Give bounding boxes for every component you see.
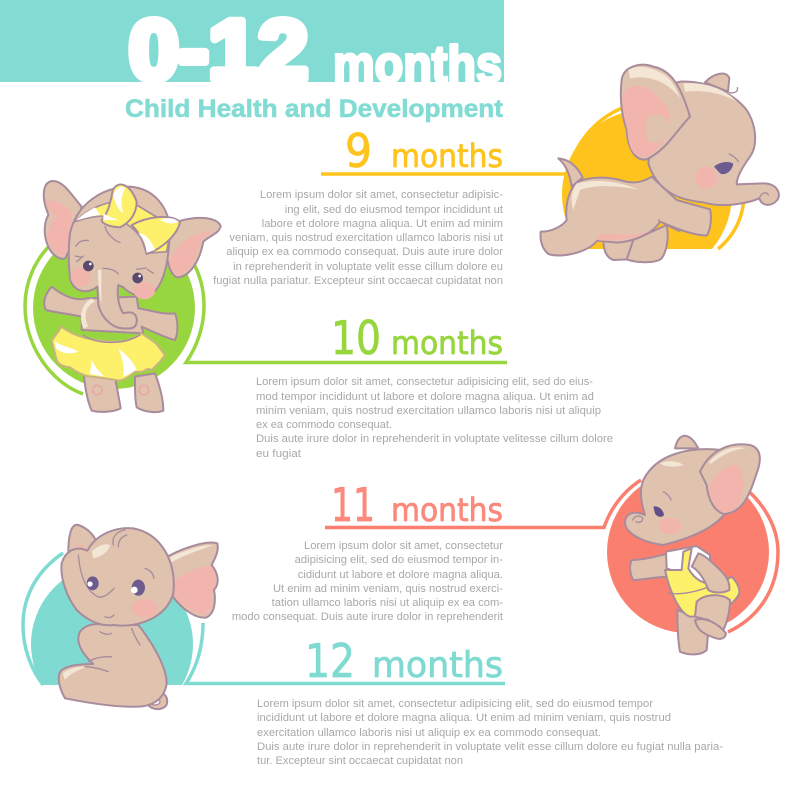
text block: 11 months (232, 540, 504, 623)
text block: 9 months: Lorem ipsum dolor sit amet, consectetur adipisic- (260, 189, 503, 201)
text block: 10 months: eu fugiat (256, 448, 302, 460)
heading: 10 months: 10 (331, 311, 381, 365)
title: 0-12 months: 0-12 (129, 3, 308, 97)
title: 0-12 months (129, 3, 502, 97)
elephant: walking in yellow overalls (625, 436, 760, 654)
heading: 12 months: 12 (305, 634, 355, 688)
header band (0, 0, 504, 82)
title: 0-12 months: months (333, 36, 502, 94)
subtitle: Child Health and Development (125, 95, 504, 123)
text block: 10 months: mod tempor incididunt ut labore et dolore magna aliqua. Ut enim ad (256, 391, 594, 403)
text block: 10 months: Duis aute irure dolor in reprehenderit in voluptate velitesse cillum dolore (256, 433, 613, 445)
heading: 10 months (331, 311, 503, 365)
elephant: dancing girl with bow and skirt (44, 181, 221, 412)
text block: 9 months (213, 189, 504, 287)
elephant: running (541, 65, 779, 262)
text block: 12 months (257, 698, 723, 767)
text block: 11 months: modo consequat. Duis aute irure dolor in reprehenderit (232, 611, 504, 623)
heading: 12 months (305, 634, 503, 688)
text block: 12 months: tur. Excepteur sint occaecat cupidatat non (257, 755, 463, 767)
green circle with ring and connector (25, 218, 507, 394)
text block: 9 months: in reprehenderit in voluptate velit esse cillum dolore eu (233, 261, 503, 273)
panel: 12 months (23, 525, 723, 767)
yellow circle with ring and connector (321, 108, 744, 249)
text block: 10 months (256, 376, 613, 460)
text block: 9 months: fugiat nulla pariatur. Excepteur sint occaecat cupidatat non (213, 275, 503, 287)
heading: 12 months: months (372, 645, 503, 686)
heading: 11 months (331, 478, 503, 532)
panel: 10 months (25, 181, 613, 460)
text block: 10 months: minim veniam, quis nostrud exercitation ullamco laboris nisi ut aliquip (256, 405, 601, 417)
elephant: sitting (59, 525, 218, 709)
heading: 11 months: 11 (331, 478, 375, 532)
heading: 9 months: months (391, 137, 503, 175)
text block: 9 months: labore et dolore magna aliqua. Ut enim ad minim (262, 218, 503, 230)
text block: 9 months: aliquip ex ea commodo consequat. Duis aute irure dolor (226, 246, 503, 258)
text block: 11 months: Lorem ipsum dolor sit amet, consectetur (304, 540, 503, 552)
teal circle with ring and connector (23, 553, 505, 685)
text block: 12 months: Duis aute irure dolor in reprehenderit in voluptate velit esse cillum dolore eu fugiat nulla paria- (257, 741, 723, 753)
text block: 11 months: adipisicing elit, sed do eiusmod tempor in- (295, 554, 503, 566)
text block: 12 months: Lorem ipsum dolor sit amet, consectetur adipisicing elit, sed do eiusmod tempor (257, 698, 653, 710)
text block: 12 months: incididunt ut labore et dolore magna aliqua. Ut enim ad minim veniam, quis nostrud (257, 712, 671, 724)
heading: 9 months (345, 124, 503, 178)
heading: 9 months: 9 (345, 124, 372, 178)
heading: 11 months: months (391, 491, 503, 529)
text block: 10 months: ex ea commodo consequat. (256, 419, 392, 431)
text block: 11 months: tation ullamco laboris nisi ut aliquip ex ea com- (272, 597, 503, 609)
panel: 9 months (213, 65, 779, 287)
panel: 11 months (232, 436, 778, 654)
text block: 11 months: cididunt ut labore et dolore magna aliqua. (298, 569, 503, 581)
text block: 9 months: ing elit, sed do eiusmod tempor incididunt ut (285, 204, 504, 216)
heading: 10 months: months (391, 324, 503, 362)
coral circle with ring and connector (325, 471, 778, 633)
text block: 9 months: veniam, quis nostrud exercitation ullamco laboris nisi ut (229, 232, 504, 244)
text block: 10 months: Lorem ipsum dolor sit amet, consectetur adipisicing elit, sed do eius- (256, 376, 593, 388)
text block: 12 months: exercitation ullamco laboris nisi ut aliquip ex ea commodo consequat. (257, 727, 601, 739)
text block: 11 months: Ut enim ad minim veniam, quis nostrud exerci- (273, 583, 503, 595)
